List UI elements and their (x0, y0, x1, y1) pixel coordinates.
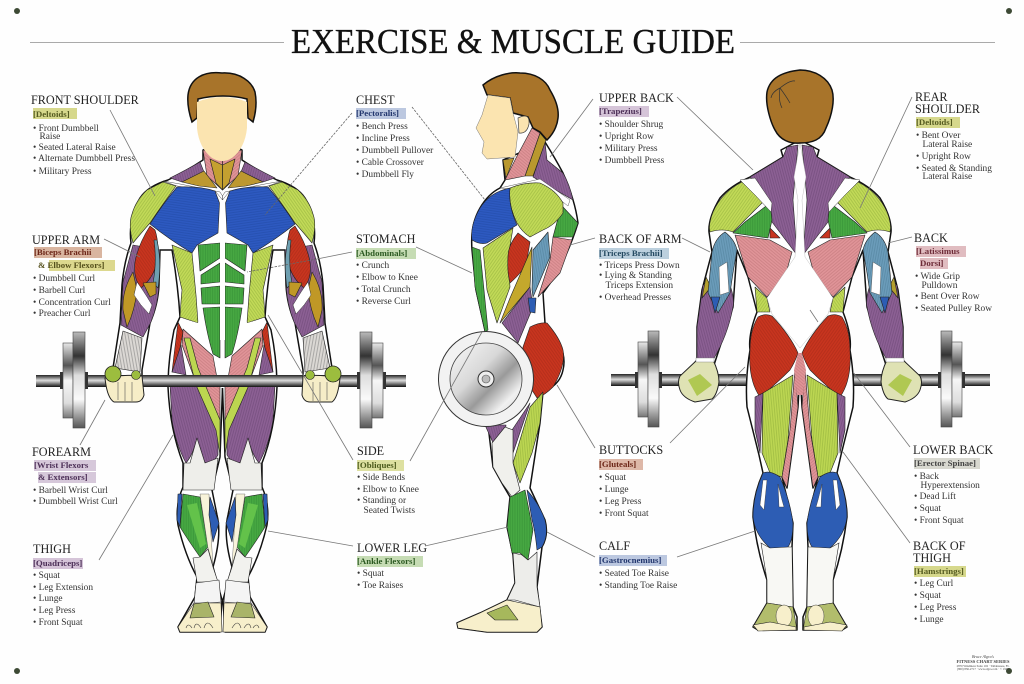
label: rear shoulder: • Upright Row (916, 152, 971, 162)
hand: front left (105, 366, 144, 402)
label: front shoulder: [Deltoids] (33, 109, 70, 119)
label: lower leg (357, 541, 427, 591)
side lower thigh purple (485, 403, 530, 460)
ankle band (194, 580, 221, 604)
label: upper back: UPPER BACK (599, 91, 674, 105)
side shin (507, 490, 533, 560)
label: side: [Obliques] (357, 460, 397, 470)
label: rear shoulder: Lateral Raise (922, 140, 972, 150)
label: upper back (599, 91, 674, 166)
neck olive (182, 171, 217, 188)
label: lower back: • Front Squat (914, 516, 964, 526)
label: rear shoulder (915, 90, 992, 182)
label: chest: • Bench Press (356, 122, 408, 132)
label: front shoulder (31, 93, 140, 177)
publisher credit: 2870 Windmere Suite 102 · Tallahassee, FL (957, 664, 1009, 669)
label: thigh: • Lunge (33, 594, 63, 604)
label: stomach: • Total Crunch (356, 285, 411, 295)
label: chest: • Dumbbell Fly (356, 170, 414, 180)
label: buttocks (599, 443, 663, 519)
side wrist blue (528, 298, 536, 313)
side biceps (508, 233, 530, 283)
side foot muscle (487, 605, 518, 620)
label: lower back: • Dead Lift (914, 491, 956, 502)
side pectoral (472, 188, 517, 244)
back forearm (697, 285, 734, 360)
label: rear shoulder: REAR (915, 90, 948, 104)
label: back: Pulldown (922, 281, 958, 291)
back thigh purple (755, 393, 763, 453)
hair whorl (771, 81, 795, 108)
gracilis (782, 368, 798, 488)
calf blue (177, 494, 219, 542)
label: rear shoulder: Lateral Raise (922, 172, 972, 182)
label: forearm: • Dumbbell Wrist Curl (33, 497, 118, 507)
label: stomach: [Abdominals] (356, 248, 407, 258)
toes (186, 623, 213, 628)
label: lower back: [Erector Spinae] (914, 458, 976, 468)
triceps strip (153, 240, 160, 288)
lower purple side (172, 345, 186, 375)
front body outline (105, 140, 222, 632)
figure: front view (36, 73, 406, 632)
label: rear shoulder: SHOULDER (915, 102, 981, 116)
calf tendon (760, 480, 784, 510)
back body outline (680, 140, 800, 630)
label: calf: • Seated Toe Raise (599, 569, 669, 579)
label: forearm: FOREARM (32, 445, 91, 459)
label: lower back: • Squat (914, 504, 941, 514)
inner elbow olive (143, 282, 156, 297)
mirrored front half (222, 140, 340, 632)
label: side: SIDE (357, 444, 384, 458)
label: buttocks: • Front Squat (599, 509, 649, 519)
label: rear shoulder: [Deltoids] (916, 117, 953, 127)
hand: front right (302, 366, 341, 402)
side abs (472, 247, 488, 332)
side face (476, 95, 518, 159)
label: calf: [Gastrocnemius] (599, 555, 661, 565)
label: calf: • Standing Toe Raise (599, 581, 677, 591)
side hair (483, 73, 558, 140)
label: rear shoulder: • Bent Over (916, 131, 961, 141)
foot (178, 603, 222, 632)
label: upper arm: • Dumbbell Curl (33, 274, 96, 284)
label: buttocks: • Leg Press (599, 497, 642, 507)
label: front shoulder: • Seated Lateral Raise (33, 143, 116, 153)
back trapezius (750, 145, 798, 255)
side deltoid (510, 183, 563, 237)
back lat (735, 235, 792, 297)
barbell: front figure (36, 332, 406, 428)
label: forearm (32, 445, 118, 507)
inner thigh (198, 385, 220, 420)
wrist blue (711, 297, 720, 313)
label: lower leg: [Ankle Flexors] (357, 556, 415, 566)
shin highlight (187, 503, 206, 548)
back glute (750, 315, 798, 397)
spine and lower back (767, 143, 833, 348)
label: lower back: Hyperextension (920, 481, 980, 491)
biceps (135, 226, 158, 288)
label: back: Dorsi] (920, 258, 944, 268)
label: back of arm (599, 232, 682, 303)
neck muscles (203, 150, 222, 190)
side ribs (172, 245, 198, 323)
label: buttocks: BUTTOCKS (599, 443, 663, 457)
label: stomach (356, 232, 418, 307)
arm yellow (702, 277, 711, 298)
label: upper back: • Military Press (599, 144, 658, 154)
foot top (190, 602, 214, 618)
label: back of arm: BACK OF ARM (599, 232, 682, 246)
label: back: • Bent Over Row (915, 292, 980, 302)
label: side: • Side Bends (357, 473, 405, 483)
label: back of thigh: BACK OF (913, 539, 966, 553)
small red (770, 228, 780, 238)
side forearm (502, 287, 533, 343)
label: chest: CHEST (356, 93, 395, 107)
side arm yellow (500, 247, 532, 323)
label: back: • Wide Grip (915, 272, 960, 282)
hand: back right (881, 358, 922, 402)
publisher credit: FITNESS CHART SERIES (956, 659, 1010, 664)
label: back: BACK (914, 231, 948, 245)
figure: back view (678, 70, 922, 631)
publisher credit: (800) 836-2717 · www.algra.com · © 1996 (957, 666, 1009, 671)
label: chest: • Incline Press (356, 134, 410, 144)
glute divide (794, 353, 806, 395)
label: lower leg: • Toe Raises (357, 581, 404, 591)
label: thigh (33, 542, 93, 628)
title: EXERCISE & MUSCLE GUIDE (291, 22, 735, 61)
side lat (538, 237, 572, 297)
label: stomach: • Crunch (356, 261, 390, 271)
label: buttocks: [Gluteals] (599, 459, 636, 469)
label: back: [Latissimus (916, 246, 960, 256)
label: upper arm: • Barbell Curl (33, 286, 86, 296)
back oblique (755, 287, 770, 312)
hair (188, 73, 256, 122)
label: upper back: • Upright Row (599, 132, 654, 142)
side hamstring (513, 392, 543, 483)
abdominal centre line (220, 200, 225, 340)
back deltoid (709, 182, 763, 232)
pelvis (182, 329, 217, 385)
label: lower back: • Back (914, 472, 939, 482)
label: stomach: • Reverse Curl (356, 297, 411, 307)
label: chest (356, 93, 434, 180)
wrist (115, 331, 142, 372)
label: thigh: • Squat (33, 571, 60, 581)
label: back of arm: Triceps Extension (606, 281, 673, 291)
side glute (523, 323, 564, 398)
shin green (180, 494, 208, 557)
label: lower leg: LOWER LEG (357, 541, 427, 555)
label: front shoulder: Raise (40, 132, 60, 142)
lower leg (193, 549, 218, 582)
deltoid (130, 182, 176, 243)
label: thigh: • Leg Extension (33, 583, 93, 593)
label: calf (599, 539, 677, 591)
hand: back left (678, 358, 719, 402)
label: back of thigh: • Leg Curl (914, 579, 954, 589)
weight plate (438, 332, 534, 426)
label: chest: • Dumbbell Pullover (356, 146, 434, 156)
leader lines (80, 97, 912, 560)
label: calf: CALF (599, 539, 630, 553)
label: back of thigh: • Squat (914, 591, 941, 601)
torso white frame (180, 306, 213, 356)
title rules (30, 42, 995, 44)
label: buttocks: • Lunge (599, 485, 629, 495)
side trapezius (533, 142, 573, 200)
hamstrings (762, 375, 793, 477)
label: lower back (913, 443, 993, 526)
label: upper back: • Shoulder Shrug (599, 120, 664, 130)
front trapezius (170, 162, 204, 182)
abs upper (198, 243, 220, 304)
label: back of thigh (913, 539, 966, 625)
label: upper arm: • Concentration Curl (33, 298, 111, 308)
shin white (200, 494, 213, 565)
label: front shoulder: FRONT SHOULDER (31, 93, 140, 107)
label: upper arm: [Biceps Brachii (34, 247, 92, 257)
label: back of arm: • Overhead Presses (599, 293, 671, 303)
calf (753, 472, 793, 549)
label: chest: • Cable Crossover (356, 158, 425, 168)
label: stomach: STOMACH (356, 232, 416, 246)
shoulder white (740, 178, 772, 212)
teres (733, 203, 772, 238)
side rear deltoid (553, 207, 578, 237)
publisher credit (956, 654, 1010, 671)
label: side: • Elbow to Knee (357, 485, 419, 495)
label: front shoulder: • Military Press (33, 167, 92, 177)
back hair (767, 70, 833, 143)
label: forearm: [Wrist Flexors (34, 460, 89, 470)
abs lower (203, 307, 220, 358)
label: upper back: • Dumbbell Press (599, 156, 665, 166)
label: chest: [Pectoralis] (356, 108, 399, 118)
lower leg white (761, 543, 793, 607)
label: back of arm: • Triceps Press Down (599, 261, 680, 271)
foot sole (753, 622, 796, 631)
publisher credit: Bruce Algra's (972, 654, 994, 659)
neck centre (210, 159, 222, 190)
label: upper arm: UPPER ARM (32, 233, 100, 247)
label: upper arm: & Elbow Flexors] (38, 260, 105, 270)
label: upper arm: • Preacher Curl (33, 309, 91, 319)
back foot (753, 603, 797, 630)
ear (518, 116, 529, 133)
side ribs (483, 228, 513, 323)
label: upper arm (32, 233, 115, 319)
side neck pink (505, 128, 540, 180)
side calf (527, 490, 546, 550)
label: back of thigh: THIGH (913, 551, 951, 565)
label: stomach: • Elbow to Knee (356, 273, 418, 283)
pectoral (150, 187, 220, 253)
label: side: Seated Twists (364, 506, 415, 516)
quadriceps (170, 385, 218, 463)
label: front shoulder: • Alternate Dumbbell Press (33, 154, 135, 164)
barbell: back figure (611, 331, 990, 427)
label: back of thigh: • Leg Press (914, 603, 957, 613)
side knee (492, 427, 520, 497)
brachioradialis (123, 272, 137, 327)
knee (183, 438, 218, 490)
triceps tendon (719, 262, 729, 295)
label: thigh: • Front Squat (33, 618, 83, 628)
label: forearm: • Barbell Wrist Curl (33, 486, 108, 496)
label: back (914, 231, 992, 314)
forearm base (121, 245, 160, 337)
collar white (163, 181, 222, 200)
tensor red (172, 322, 183, 372)
label: back of arm: [Triceps Brachii] (599, 248, 663, 258)
collar (500, 179, 570, 206)
tendon (134, 282, 152, 314)
label: forearm: & Extensors] (38, 472, 88, 482)
sartorius (184, 338, 220, 455)
label: buttocks: • Squat (599, 473, 626, 483)
mirrored back half (800, 140, 920, 631)
label: side (357, 444, 419, 516)
label: back of arm: • Lying & Standing (599, 271, 672, 281)
label: upper back: [Trapezius] (599, 106, 642, 116)
side neck olive (503, 133, 546, 178)
side body outline (457, 142, 578, 632)
back triceps (708, 232, 737, 313)
label: back of thigh: • Lunge (914, 615, 944, 625)
label: back of thigh: [Hamstrings] (914, 566, 964, 576)
side foot (457, 600, 542, 632)
label: thigh: THIGH (33, 542, 71, 556)
side triceps (532, 232, 550, 297)
heel (776, 605, 792, 627)
label: side: • Standing or (357, 496, 407, 506)
label: thigh: [Quadriceps] (33, 558, 82, 568)
label: rear shoulder: • Seated & Standing (916, 164, 992, 174)
label: lower back: LOWER BACK (913, 443, 993, 457)
label: front shoulder: • Front Dumbbell (33, 124, 99, 134)
label: thigh: • Leg Press (33, 606, 76, 616)
label: back: • Seated Pulley Row (915, 304, 992, 314)
face (197, 97, 247, 161)
side ankle (507, 552, 540, 607)
label: lower leg: • Squat (357, 569, 384, 579)
figure: side view (438, 73, 578, 632)
